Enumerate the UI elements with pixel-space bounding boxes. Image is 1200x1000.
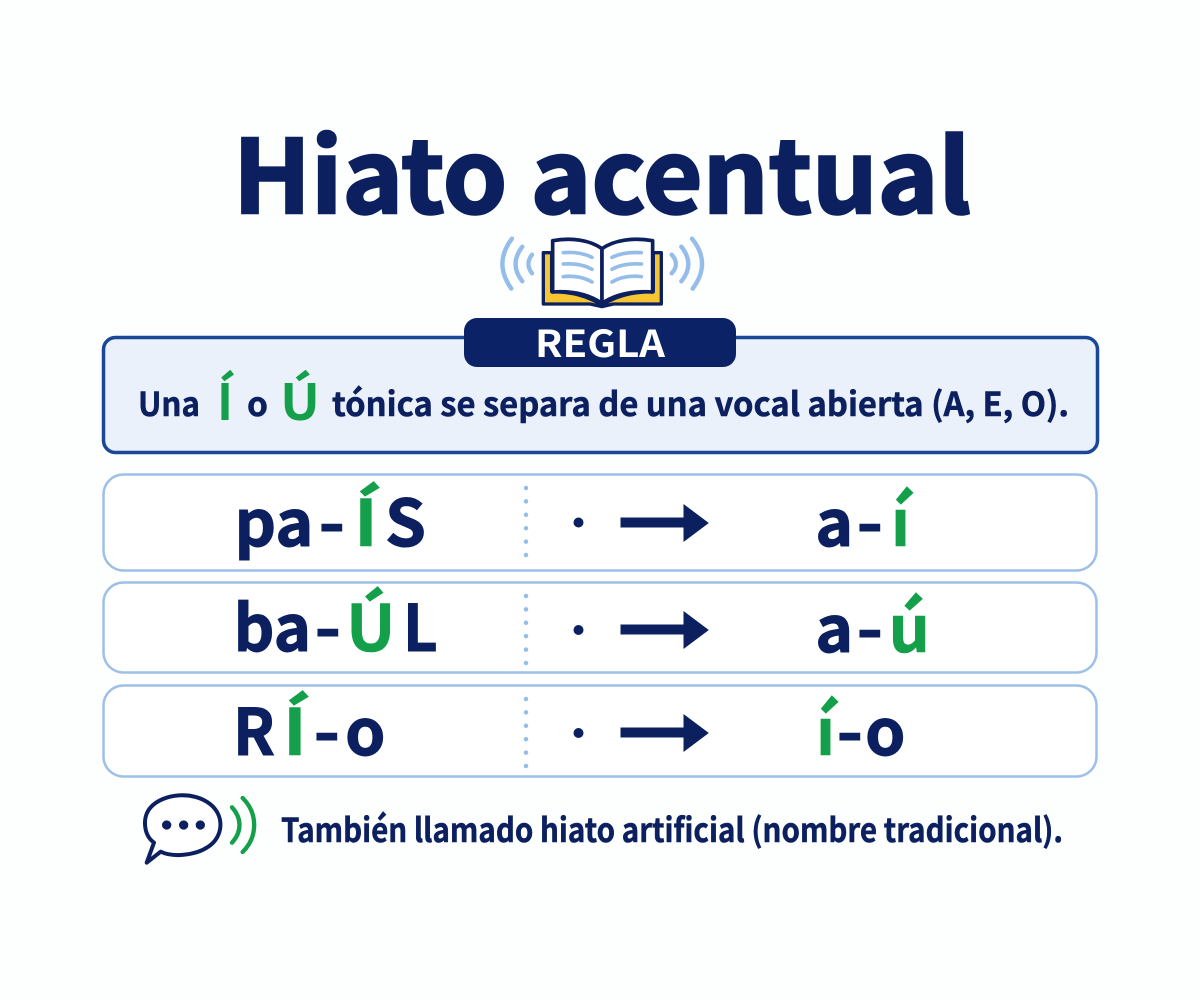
- arrow: [574, 505, 708, 541]
- vowel pair: a-í: [815, 473, 913, 565]
- syllable split word: pa-ÍS: pa: [234, 473, 314, 565]
- dotted divider: [524, 596, 528, 664]
- vowel pair: í-o: [816, 682, 906, 774]
- syllable split word: ba-ÚL: -: [314, 578, 341, 670]
- syllable split word: pa-ÍS: S: [385, 473, 426, 565]
- rule sentence: Í: [217, 363, 234, 435]
- syllable split word: ba-ÚL: ba: [234, 578, 311, 670]
- syllable split word: RÍ-o: o: [345, 682, 386, 774]
- rule label pill: REGLA: [535, 314, 665, 368]
- syllable split word: RÍ-o: R: [233, 682, 275, 774]
- syllable split word: pa-ÍS: [234, 473, 426, 565]
- example row: país: [104, 473, 1096, 570]
- syllable split word: RÍ-o: [233, 682, 386, 774]
- icon: speech bubble with sound waves: [145, 795, 254, 863]
- syllable split word: ba-ÚL: Ú: [346, 578, 396, 670]
- syllable split word: RÍ-o: Í: [283, 682, 309, 774]
- rule sentence: o: [247, 378, 268, 426]
- rule sentence: Ú: [280, 363, 320, 435]
- dotted divider: [524, 699, 528, 767]
- vowel pair: a-ú: a: [815, 579, 853, 671]
- vowel pair: a-ú: [815, 579, 930, 671]
- arrow: [574, 715, 708, 751]
- rule sentence: [138, 363, 1069, 435]
- vowel pair: a-ú: -: [856, 579, 883, 671]
- arrow: [574, 612, 708, 648]
- syllable split word: ba-ÚL: L: [403, 578, 438, 670]
- rule sentence: tónica se separa de una vocal abierta (A, E, O).: [332, 378, 1069, 426]
- syllable split word: RÍ-o: -: [314, 682, 340, 774]
- vowel pair: í-o: o: [865, 682, 906, 774]
- dotted divider: [524, 488, 528, 556]
- example row: río: [104, 682, 1096, 776]
- vowel pair: í-o: -: [836, 682, 863, 774]
- example row: baúl: [104, 578, 1096, 672]
- vowel pair: a-í: -: [856, 473, 883, 565]
- vowel pair: a-í: í: [891, 473, 913, 565]
- vowel pair: í-o: í: [816, 682, 838, 774]
- syllable split word: ba-ÚL: [234, 578, 438, 670]
- vowel pair: a-ú: ú: [888, 579, 930, 671]
- vowel pair: a-í: a: [815, 473, 853, 565]
- syllable split word: pa-ÍS: -: [318, 473, 345, 565]
- syllable split word: pa-ÍS: Í: [354, 473, 380, 565]
- panel: rule: [104, 314, 1098, 452]
- footer note: También llamado hiato artificial (nombre tradicional).: [281, 804, 1063, 852]
- rule sentence: Una: [138, 378, 200, 426]
- rule label pill: [464, 314, 736, 368]
- icon: open book with sound waves: [502, 239, 702, 307]
- title: Hiato acentual: [233, 97, 971, 243]
